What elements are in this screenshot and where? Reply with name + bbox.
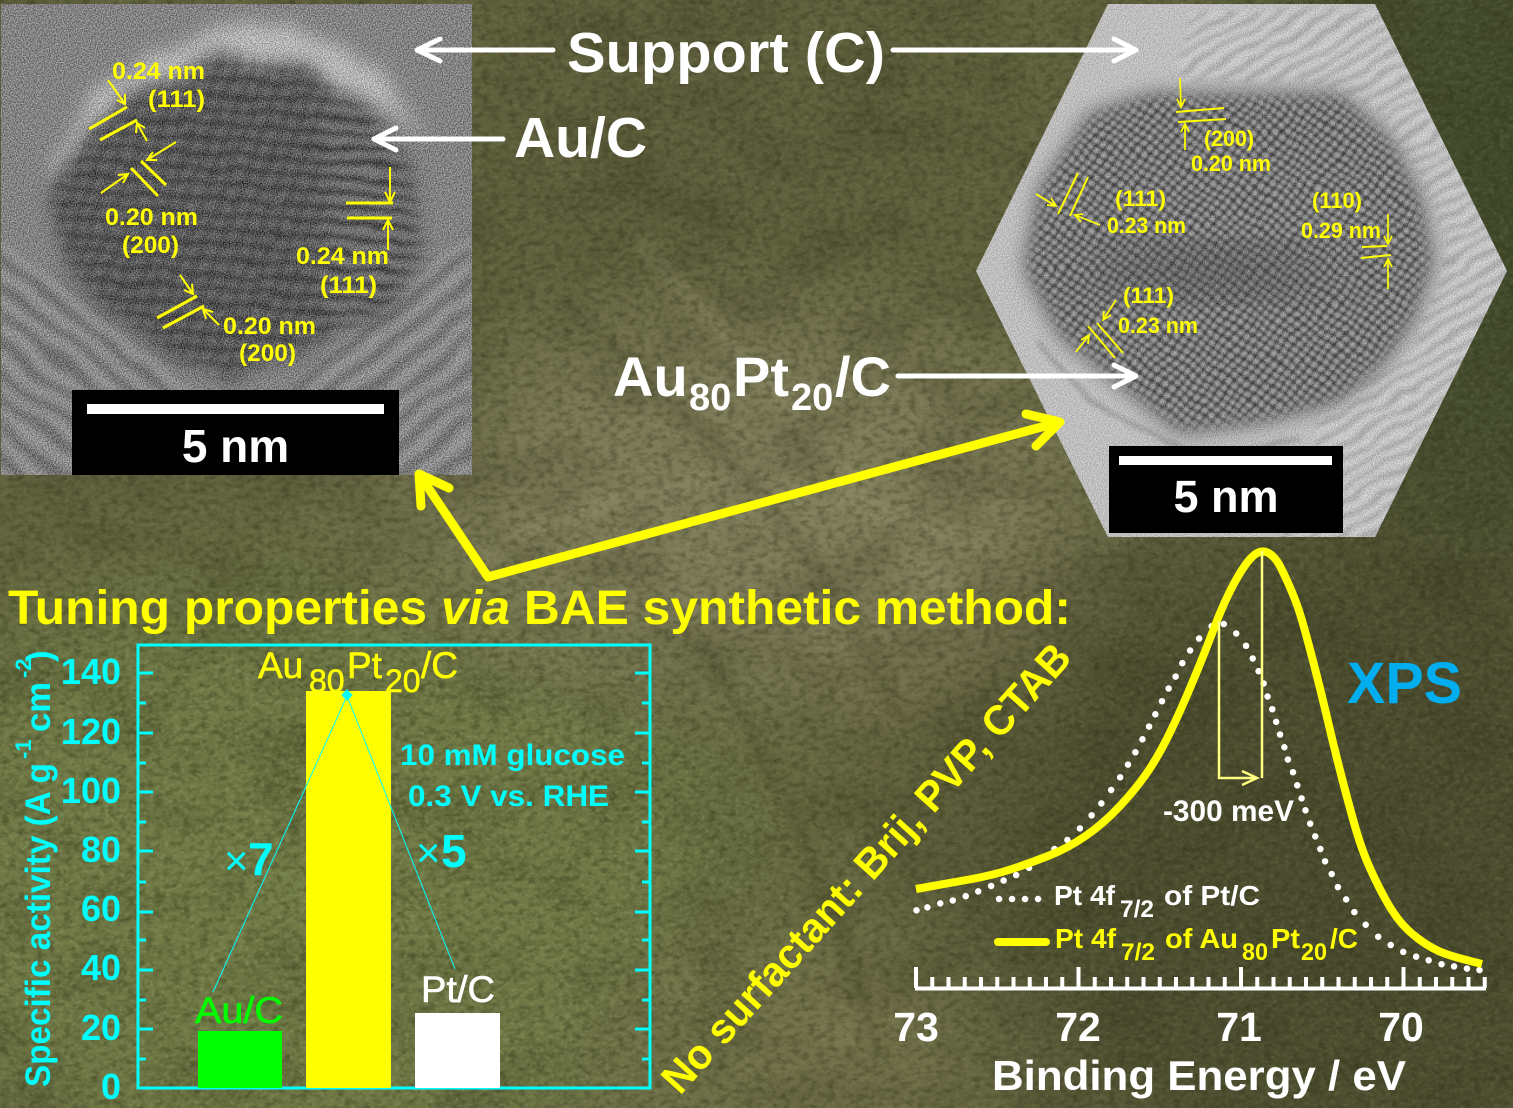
spacing labels: (111) [1115, 186, 1166, 211]
label: Au80Pt20/C bar: 80 [309, 663, 345, 699]
condition text [400, 739, 625, 813]
spacing arrows [101, 80, 395, 325]
spacing labels: 0.20 nm [223, 313, 316, 340]
x axis numbers: 73 [893, 1004, 939, 1050]
condition text: 10 mM glucose [400, 739, 625, 772]
comparison lines [213, 690, 455, 992]
legend: Au80Pt20/C: Pt 4f [1055, 923, 1117, 954]
factor x7: × [224, 837, 249, 884]
bar: Pt/C [415, 1013, 500, 1088]
y axis numbers: 120 [61, 711, 121, 752]
legend: Au80Pt20/C [998, 923, 1358, 966]
arrow: Au/C label [374, 128, 503, 150]
legend: Pt/C: 7/2 [1120, 896, 1154, 923]
spacing labels [105, 58, 389, 367]
label: Support (C): Support (C) [567, 21, 885, 85]
factor x5: 5 [441, 825, 467, 877]
y axis title: Specific activity (A g [19, 763, 58, 1087]
factor x7: 7 [248, 833, 274, 885]
bright support halo [46, 22, 424, 176]
label: Au80Pt20/C bar [258, 645, 458, 699]
x axis numbers: 72 [1055, 1004, 1101, 1050]
spacing labels: (200) [239, 340, 296, 367]
spacing labels: (111) [320, 272, 377, 299]
outer lattice stripes lower right [290, 240, 472, 475]
spacing labels [1107, 126, 1381, 338]
bar chart: specific activity [11, 645, 650, 1107]
annotations on Au80Pt20/C micrograph [1036, 78, 1392, 358]
legend: Au80Pt20/C: /C [1330, 923, 1358, 954]
factor x7 [224, 833, 274, 885]
y axis title: -2 [11, 658, 36, 678]
y axis title: -1 [11, 739, 36, 759]
legend: Au80Pt20/C: 7/2 [1121, 939, 1155, 966]
lattice markers [89, 107, 393, 328]
label: Au80Pt20/C: 20 [791, 377, 833, 419]
outer lattice stripes lower left [1, 245, 190, 475]
legend: Au80Pt20/C: Pt [1271, 923, 1300, 954]
legend: Au80Pt20/C: 80 [1242, 939, 1268, 966]
arrow: double-headed yellow method arrow [419, 414, 1060, 577]
label: Au/C bar: Au/C [195, 990, 283, 1031]
spacing labels: (200) [122, 232, 179, 259]
legend: Au80Pt20/C: 20 [1301, 939, 1327, 966]
legend: Pt/C: of Pt/C [1164, 880, 1260, 911]
x axis numbers: 70 [1378, 1004, 1424, 1050]
spacing labels: 0.23 nm [1118, 313, 1198, 338]
spacing labels: (111) [148, 86, 205, 113]
spacing labels: 0.20 nm [1191, 151, 1271, 176]
y axis numbers: 60 [81, 888, 121, 929]
dark central band [1090, 250, 1330, 294]
Au80Pt20/C solid curve [916, 551, 1482, 964]
factor x5: × [416, 829, 441, 876]
x axis [915, 967, 1486, 988]
y axis numbers: 0 [101, 1066, 121, 1107]
spacing labels: 0.23 nm [1107, 213, 1186, 238]
label: Au80Pt20/C: 80 [689, 377, 731, 419]
y axis title: ) [20, 650, 59, 662]
spacing labels: (110) [1312, 188, 1362, 213]
y axis numbers: 20 [81, 1007, 121, 1048]
spacing labels: 0.20 nm [105, 204, 198, 231]
chart frame and ticks [138, 645, 650, 1088]
peak shift marker [1219, 551, 1262, 785]
arrow: Au80Pt20/C label [898, 365, 1136, 387]
scale bar: Au/C: 5 nm [182, 420, 289, 472]
x axis numbers [893, 1004, 1424, 1050]
scale bar: Au/C [72, 390, 399, 475]
factor x5 [416, 825, 467, 877]
atomic lattice [970, 60, 1513, 460]
label: Au80Pt20/C: Pt [733, 345, 789, 408]
x axis numbers: 71 [1216, 1004, 1262, 1050]
label: Au80Pt20/C bar: Pt [347, 645, 383, 686]
y axis numbers: 80 [81, 829, 121, 870]
panel: Au/C TEM micrograph [0, 0, 472, 475]
legend: Pt/C [999, 880, 1260, 923]
noise grain [1, 4, 472, 475]
label: Au80Pt20/C [613, 345, 891, 419]
y axis title: cm [19, 682, 58, 732]
label: Au80Pt20/C bar: 20 [385, 663, 421, 699]
lattice fringes [60, 60, 400, 367]
arrow: Support to Au/C [417, 39, 553, 61]
spacing labels: 0.24 nm [112, 58, 205, 85]
y axis numbers [61, 651, 121, 1107]
legend: Pt/C: Pt 4f [1054, 880, 1116, 911]
mowing streaks [480, 240, 1000, 1060]
label: Pt/C bar: Pt/C [421, 969, 495, 1010]
bar: Au/C [198, 1031, 282, 1088]
y axis numbers: 140 [61, 651, 121, 692]
ripple band around particle [1180, 10, 1510, 540]
arrow: Support to Au80Pt20/C [893, 39, 1136, 61]
scale bar: Au80Pt20/C [1109, 446, 1343, 533]
Pt/C dotted curve [916, 624, 1480, 970]
shift label: -300 meV [1163, 795, 1294, 828]
annotations on Au/C micrograph [89, 58, 395, 367]
lattice markers [1058, 108, 1391, 358]
y axis title [11, 650, 59, 1087]
y axis numbers: 40 [81, 947, 121, 988]
particle body [1025, 95, 1432, 432]
spacing arrows [1036, 78, 1392, 352]
label: Au80Pt20/C: /C [835, 345, 891, 408]
spacing labels: 0.24 nm [296, 243, 389, 270]
bar: Au80Pt20/C [306, 691, 391, 1088]
legend: Au80Pt20/C: of Au [1165, 923, 1238, 954]
x axis title: Binding Energy / eV [992, 1052, 1406, 1099]
spacing labels: 0.29 nm [1301, 218, 1381, 243]
panel: Au80Pt20/C TEM micrograph in hexagon [970, 0, 1513, 540]
scale bar: Au80Pt20/C: 5 nm [1173, 471, 1279, 522]
heading: tuning properties: Tuning properties via BAE synthetic method: [8, 582, 1071, 635]
label: Au80Pt20/C: Au [613, 345, 688, 408]
spacing labels: (111) [1123, 283, 1174, 308]
label: Au80Pt20/C bar: /C [421, 645, 458, 686]
label: Au80Pt20/C bar: Au [258, 645, 303, 686]
label: Au/C: Au/C [514, 106, 647, 170]
particle body [50, 62, 418, 380]
y axis numbers: 100 [61, 770, 121, 811]
rotated label: no surfactant: No surfactant: Brij, PVP, CTAB [652, 634, 1080, 1102]
condition text: 0.3 V vs. RHE [408, 780, 609, 813]
XPS heading: XPS [1347, 651, 1462, 716]
crossed fringes [58, 55, 330, 374]
noise grain [970, 0, 1513, 540]
spacing labels: (200) [1204, 126, 1254, 151]
strong fringes at upper right [316, 124, 426, 308]
shaded ring [1040, 340, 1300, 454]
line chart: XPS spectra [893, 551, 1486, 1099]
